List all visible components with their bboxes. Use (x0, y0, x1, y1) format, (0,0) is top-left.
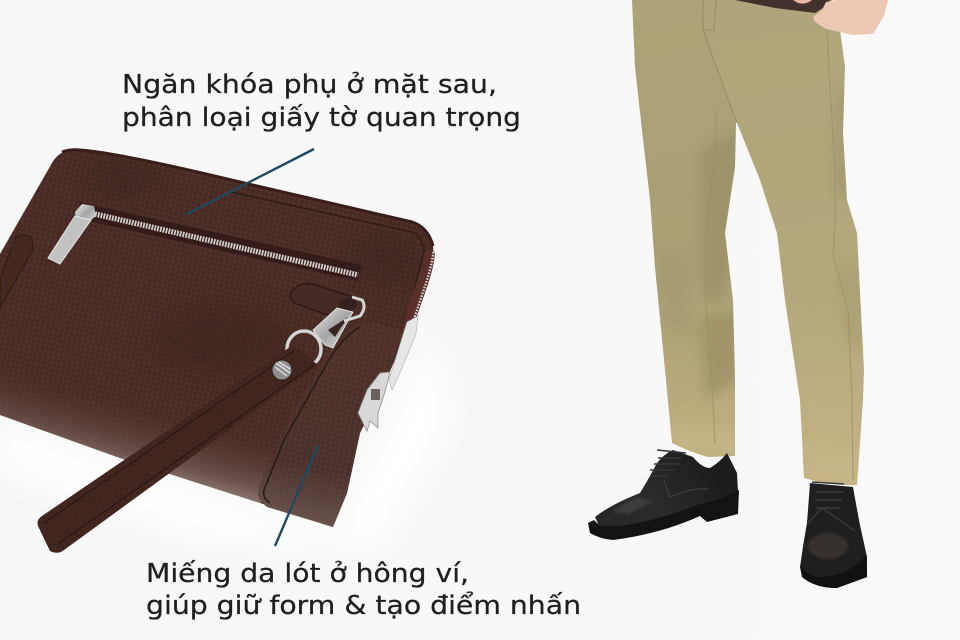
leader line: back pocket (187, 149, 314, 214)
left trouser folds (672, 132, 736, 456)
left shoe upper (595, 450, 738, 528)
small leather tab (290, 284, 353, 314)
right side zipper band (400, 250, 435, 335)
right trouser leg (700, 0, 864, 485)
strap stitching (44, 351, 314, 544)
callout: back pocket (122, 70, 521, 133)
right shoe (800, 482, 867, 588)
zip binding on top edge (62, 150, 433, 246)
leader line: side panel (275, 445, 318, 546)
bag leather weave texture (0, 150, 433, 527)
bag body (0, 150, 433, 527)
front zip pocket (48, 202, 362, 281)
callout: side panel: giúp giữ form & tạo điểm nhấn (146, 591, 581, 621)
callout: side panel: Miếng da lót ở hông ví, (146, 559, 469, 589)
side buckle (358, 316, 418, 431)
bag soft highlight (0, 340, 450, 545)
zipper pull (48, 216, 91, 264)
upper ring (344, 297, 364, 321)
bag bottom fade (0, 163, 412, 503)
lower ring (287, 331, 321, 367)
callout: back pocket: phân loại giấy tờ quan trọng (122, 103, 521, 133)
left shoe toe highlight (612, 497, 652, 514)
left side tab (0, 235, 33, 308)
right shoe laces (812, 482, 844, 508)
photo: model legs and shoes (588, 0, 888, 588)
wrist strap (38, 345, 318, 553)
fingernail detail (793, 0, 812, 4)
photo: leather clutch bag (0, 150, 450, 553)
trouser seams (705, 110, 716, 445)
zipper head (75, 204, 96, 224)
right shoe sole (801, 555, 867, 588)
panel stitching (264, 327, 360, 503)
left trouser leg (632, 0, 760, 457)
right shoe toe highlight (808, 533, 848, 559)
zipper teeth (95, 214, 358, 275)
snap hook (313, 308, 353, 348)
right trouser folds (814, 90, 863, 485)
stitch line (230, 192, 424, 290)
strap tail (338, 296, 358, 316)
side leather panel (258, 322, 405, 527)
callout: side panel (146, 559, 581, 621)
left shoe laces (650, 450, 686, 476)
rivet (272, 360, 292, 380)
left shoe sole (588, 490, 739, 540)
callout: back pocket: Ngăn khóa phụ ở mặt sau, (122, 70, 497, 100)
dark shading on bag (90, 163, 415, 375)
left shoe (588, 450, 739, 540)
hand (813, 0, 888, 35)
clutch held in hand (735, 0, 830, 13)
metal clasp hardware (287, 296, 364, 367)
